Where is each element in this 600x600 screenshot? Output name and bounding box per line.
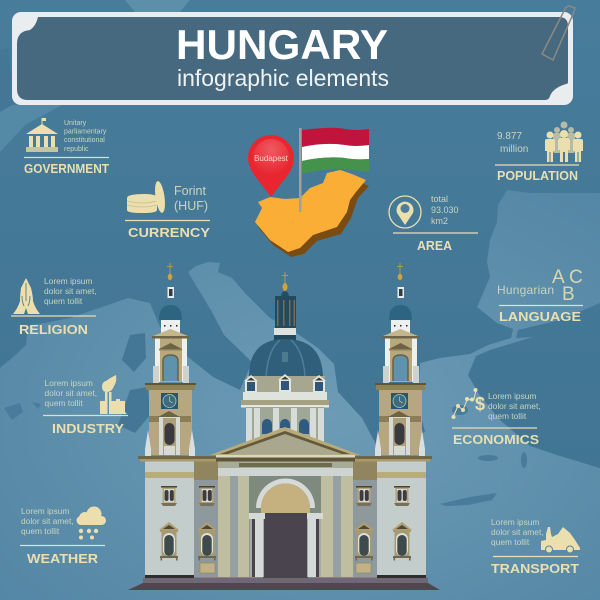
industry text: quem tollit — [44, 398, 83, 408]
economics text: quem tollit — [488, 411, 527, 421]
weather text: Lorem ipsum — [21, 506, 69, 516]
letters A B C: A — [552, 267, 565, 288]
icon: coins — [127, 181, 167, 213]
religion text: dolor sit amet, — [44, 286, 97, 296]
economics text: Lorem ipsum — [488, 391, 536, 401]
currency label: CURRENCY — [128, 225, 210, 240]
location pin: Budapest: Budapest — [254, 154, 289, 163]
currency block — [125, 181, 210, 240]
basilica building — [128, 263, 440, 590]
industry label: INDUSTRY — [52, 421, 124, 436]
area label: AREA — [417, 238, 453, 253]
cornice — [138, 455, 432, 462]
area text: total — [431, 194, 448, 204]
economics text: dolor sit amet, — [488, 401, 541, 411]
currency text: Forint — [174, 184, 206, 198]
door — [263, 513, 308, 578]
industry block — [43, 375, 128, 436]
government text: republic — [64, 146, 89, 153]
economics label: ECONOMICS — [453, 432, 539, 447]
economics block — [452, 388, 541, 447]
icon: economic chart and dollar: $ — [475, 394, 485, 414]
map of Hungary — [255, 170, 366, 252]
currency text: (HUF) — [174, 199, 208, 213]
central dome — [241, 272, 329, 443]
left tower — [145, 263, 196, 457]
icon: area pin — [389, 196, 421, 228]
transport text: dolor sit amet, — [491, 527, 544, 537]
letters A B C: C — [569, 267, 583, 288]
icon: praying hands — [13, 278, 40, 314]
icon: government building — [26, 118, 58, 152]
religion text: quem tollit — [44, 296, 83, 306]
icon: factory — [100, 375, 127, 414]
map shadow — [258, 176, 369, 257]
icon: people — [545, 122, 583, 162]
population block — [495, 122, 583, 183]
title banner — [12, 6, 575, 105]
letters A B C: B — [562, 284, 575, 305]
language block — [497, 267, 583, 324]
area text: 93.030 — [431, 205, 459, 215]
transport text: quem tollit — [491, 537, 530, 547]
religion block — [11, 276, 97, 337]
icon: rain cloud — [76, 506, 106, 540]
windows — [159, 486, 412, 573]
arch — [256, 478, 315, 508]
right tower — [375, 263, 426, 457]
population label: POPULATION — [497, 168, 578, 183]
government text: constitutional — [64, 137, 105, 144]
weather text: quem tollit — [21, 526, 60, 536]
icon: dump truck — [541, 527, 580, 553]
area block — [389, 194, 478, 253]
subtitle: infographic elements — [177, 65, 389, 91]
transport label: TRANSPORT — [491, 561, 579, 576]
weather text: dolor sit amet, — [21, 516, 74, 526]
religion text: Lorem ipsum — [44, 276, 92, 286]
area text: km2 — [431, 216, 448, 226]
population text: million — [500, 144, 528, 155]
population text: 9.877 — [497, 131, 522, 142]
language label: LANGUAGE — [499, 309, 581, 324]
weather block — [20, 506, 106, 566]
columns — [218, 476, 353, 577]
language text: Hungarian — [497, 283, 554, 297]
government text: parliamentary — [64, 128, 107, 136]
industry text: dolor sit amet, — [44, 388, 97, 398]
map of Hungary with pin and flag — [248, 128, 369, 257]
transport block — [491, 517, 580, 576]
religion label: RELIGION — [19, 322, 88, 337]
flag of Hungary — [299, 128, 369, 212]
industry text: Lorem ipsum — [44, 378, 93, 388]
pediment — [210, 427, 360, 455]
transport text: Lorem ipsum — [491, 517, 539, 527]
government block — [24, 118, 109, 176]
title: HUNGARY — [176, 21, 388, 68]
government text: Unitary — [64, 120, 87, 127]
main facade — [128, 455, 440, 590]
paperclip — [542, 6, 575, 60]
weather label: WEATHER — [27, 551, 99, 566]
steps — [128, 575, 440, 590]
government label: GOVERNMENT — [24, 161, 109, 176]
